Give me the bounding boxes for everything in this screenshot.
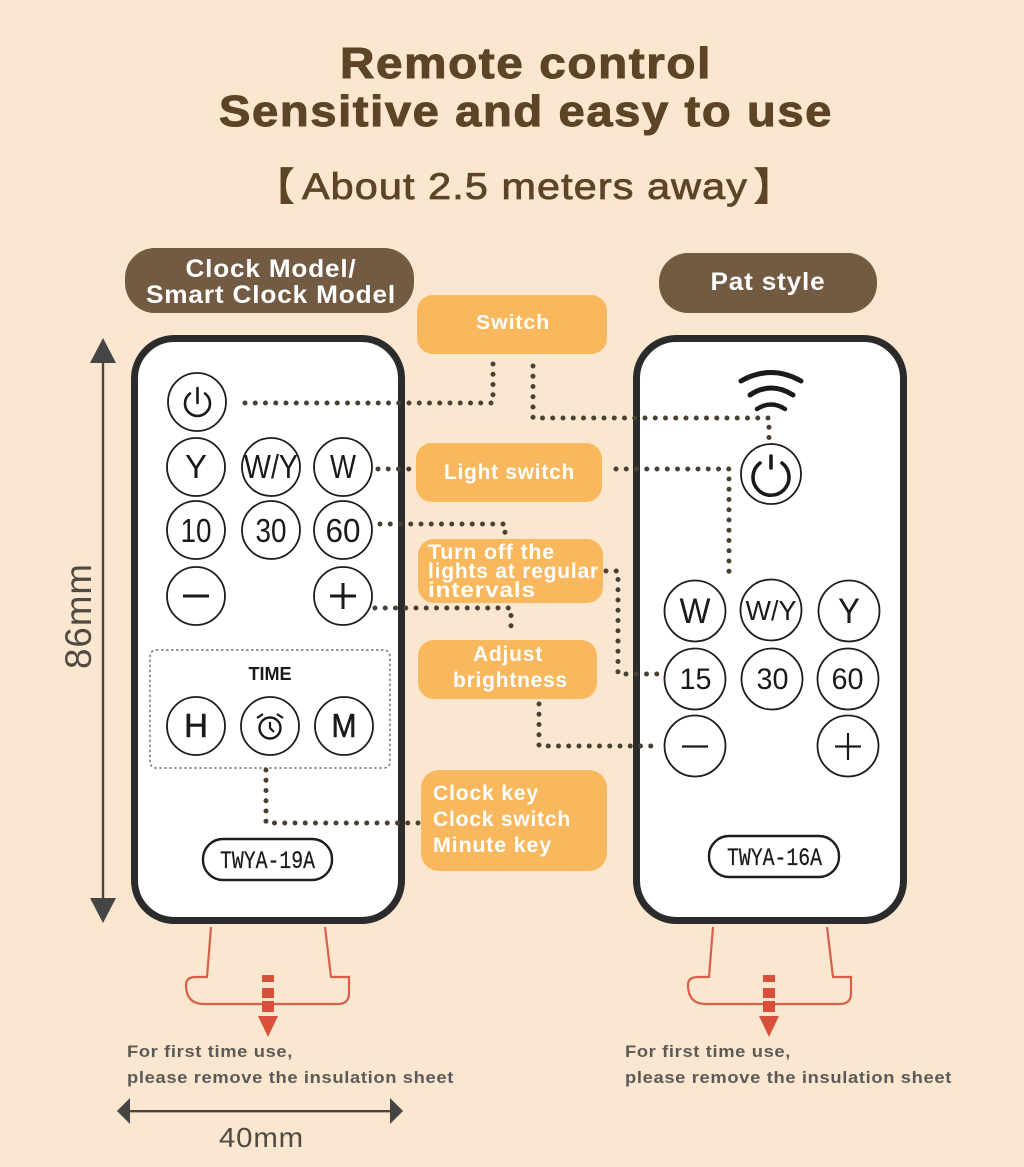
icon: power button	[741, 444, 801, 504]
note: left: please remove the insulation sheet	[127, 1068, 454, 1087]
label: light switch	[416, 443, 602, 502]
buttons: light modes: W	[680, 592, 710, 631]
buttons: timers: 15	[680, 663, 712, 696]
label: clock keys	[421, 770, 607, 871]
panel: time keys	[150, 650, 390, 768]
buttons: light modes	[167, 438, 372, 496]
badge: clock model: Smart Clock Model	[146, 281, 396, 309]
text: 40mm: 40mm	[219, 1122, 304, 1153]
label: switch: Switch	[476, 312, 550, 334]
panel: left remote	[134, 338, 402, 920]
badge: clock model: Clock Model/	[186, 255, 356, 283]
buttons: timers: 30	[756, 663, 788, 696]
note: right: For first time use,	[625, 1042, 791, 1061]
title	[219, 39, 833, 136]
buttons: light modes: Y	[838, 592, 860, 631]
model label: TWYA-19A	[220, 847, 315, 876]
subtitle: range: 【	[256, 167, 294, 209]
panel: right remote	[636, 338, 904, 920]
label: switch	[417, 295, 607, 354]
label: light switch: Light switch	[444, 461, 575, 484]
label: adjust brightness: Adjust	[473, 643, 543, 666]
label: clock keys: Clock key	[433, 782, 539, 805]
buttons: timers: 60	[832, 663, 864, 696]
buttons: light modes: Y	[185, 448, 207, 485]
buttons: timers: 60	[326, 512, 360, 549]
buttons: timers: 10	[180, 512, 212, 549]
note: right: please remove the insulation sheet	[625, 1068, 952, 1087]
label: timer off: lights at regular	[428, 560, 599, 583]
note: left: For first time use,	[127, 1042, 293, 1061]
buttons: brightness	[167, 567, 372, 625]
buttons: light modes	[664, 580, 880, 642]
buttons: light modes: W/Y	[746, 595, 797, 626]
model label: TWYA-16A	[727, 844, 822, 873]
illustration: left insulation sheet	[186, 927, 349, 1037]
badge: pat style: Pat style	[710, 268, 826, 296]
icon: power button	[168, 373, 226, 431]
label: timer off: intervals	[428, 579, 536, 602]
panel: time keys: TIME	[248, 664, 292, 684]
arrow: width dimension	[117, 1098, 403, 1124]
connector lines	[245, 362, 769, 823]
buttons: timers: 30	[256, 512, 286, 549]
badge: clock model	[125, 248, 414, 313]
label: adjust brightness: brightness	[453, 669, 568, 692]
buttons: brightness	[664, 716, 878, 776]
title: Sensitive and easy to use	[219, 87, 833, 136]
buttons: timers	[664, 648, 878, 710]
illustration: right insulation sheet	[688, 927, 851, 1037]
note: left	[127, 1042, 454, 1087]
buttons: timers	[167, 501, 372, 559]
label: adjust brightness	[418, 640, 597, 699]
label: clock keys: Clock switch	[433, 808, 571, 831]
text: 86mm: 86mm	[58, 563, 99, 669]
model label	[709, 836, 839, 877]
buttons: light modes: W/Y	[244, 448, 298, 485]
arrow: height dimension	[90, 338, 116, 923]
note: right	[625, 1042, 952, 1087]
subtitle: range: About 2.5 meters away	[302, 166, 748, 207]
model label	[203, 839, 332, 880]
label: timer off: Turn off the	[428, 541, 555, 564]
icon: wireless signal	[741, 372, 801, 409]
badge: pat style	[659, 253, 877, 313]
title: Remote control	[340, 39, 712, 88]
label: timer off	[418, 539, 603, 603]
panel: time keys: M	[332, 707, 356, 744]
label: clock keys: Minute key	[433, 834, 552, 857]
subtitle: range: 】	[754, 167, 792, 209]
panel: time keys: H	[184, 707, 208, 744]
buttons: light modes: W	[330, 448, 357, 485]
